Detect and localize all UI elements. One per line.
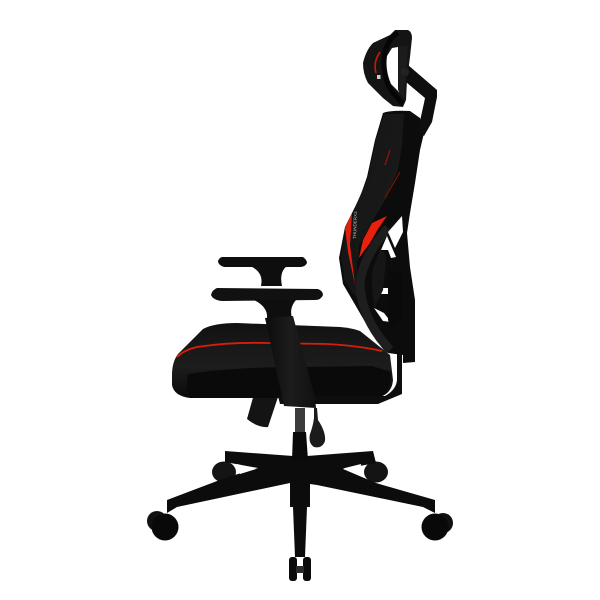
arm upright	[265, 316, 316, 408]
red accent centre	[359, 216, 387, 258]
seat bracket	[278, 353, 402, 404]
backrest	[339, 111, 424, 363]
upper arm stem	[250, 266, 287, 286]
headrest frame	[384, 33, 403, 104]
mesh panel	[350, 114, 404, 262]
headrest label	[377, 75, 380, 79]
headrest support arm	[400, 65, 437, 136]
five-star base arms	[167, 451, 435, 557]
gas cylinder	[292, 408, 308, 460]
armrest	[211, 257, 323, 408]
headrest	[363, 30, 437, 136]
arm neck	[254, 300, 296, 318]
front-right caster	[422, 513, 453, 540]
base gaps	[237, 464, 361, 474]
rear gaps	[374, 216, 403, 322]
headrest adjuster strip	[398, 46, 408, 98]
backrest frame silhouette	[339, 111, 424, 363]
lumbar pad	[372, 250, 386, 307]
brand text: THUNDERX3	[352, 211, 358, 239]
tilt knob	[247, 394, 279, 427]
seat cushion	[172, 323, 393, 398]
upper arm pad	[218, 257, 307, 267]
height lever	[310, 408, 325, 447]
seat	[172, 323, 402, 404]
lumbar mechanism	[388, 271, 402, 330]
chair base	[147, 394, 453, 581]
rear casters	[212, 462, 388, 482]
red piping	[177, 343, 382, 357]
front caster	[289, 557, 311, 581]
pivot	[401, 68, 409, 76]
thin red line	[385, 172, 400, 198]
lower side panel	[341, 215, 358, 300]
front-left caster	[147, 511, 178, 540]
red accent left	[345, 213, 355, 285]
headrest red stripe	[375, 52, 380, 73]
lower cushion panel	[187, 366, 391, 398]
headrest opening	[386, 47, 403, 96]
small red slit	[385, 150, 390, 165]
headrest pad	[363, 30, 412, 107]
lower arm pad	[211, 288, 323, 301]
frame sweep	[360, 228, 390, 350]
